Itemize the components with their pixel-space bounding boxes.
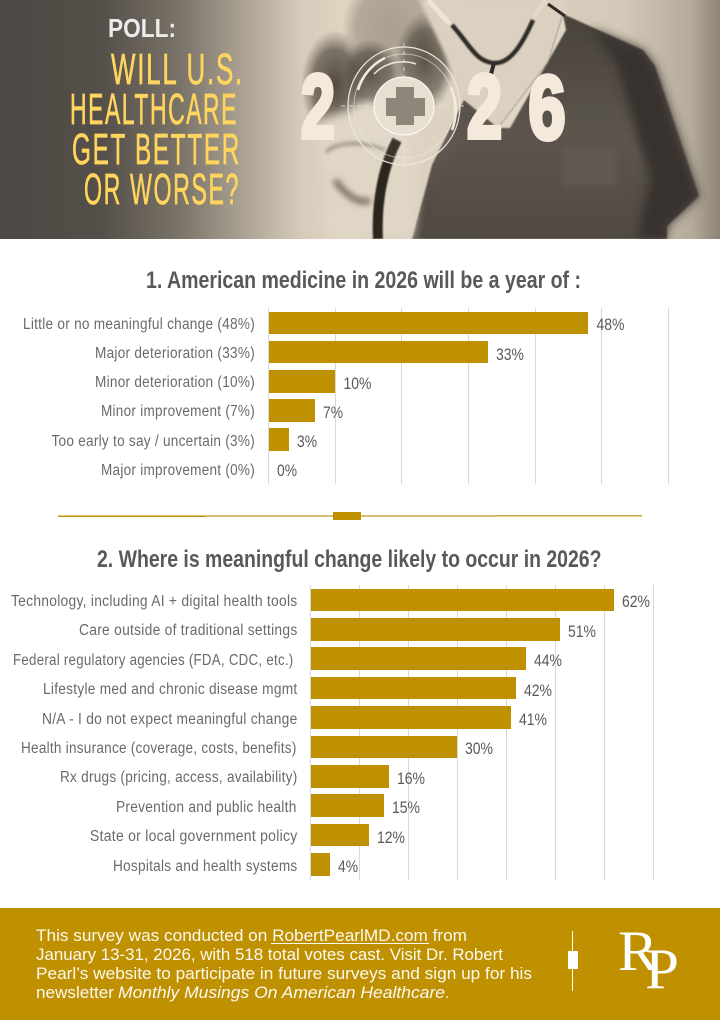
value labels <box>277 315 624 480</box>
value labels: 4% <box>338 857 358 876</box>
value labels: 3% <box>297 432 317 451</box>
category labels: Technology, including AI + digital health tools <box>11 593 298 610</box>
category labels: Major improvement (0%) <box>101 462 255 479</box>
survey note text: Pearl’s website to participate in future surveys and sign up for his <box>36 964 532 983</box>
bars <box>311 589 614 876</box>
headline: OR WORSE? <box>84 165 240 214</box>
value labels: 62% <box>622 592 650 611</box>
value labels: 48% <box>596 315 624 334</box>
headline: HEALTHCARE <box>70 85 238 134</box>
value labels <box>338 592 650 876</box>
headline <box>72 53 240 205</box>
logo: RP monogram: R <box>618 920 658 983</box>
category labels: Minor improvement (7%) <box>101 403 255 420</box>
survey note text: . <box>445 983 449 1002</box>
footer divider <box>568 931 578 991</box>
heading: question 1: 1. American medicine in 2026 will be a year of : <box>146 267 581 294</box>
heading: question 2: 2. Where is meaningful change likely to occur in 2026? <box>97 546 602 573</box>
section divider <box>58 512 642 520</box>
bar chart: question 2 <box>11 585 654 880</box>
category labels: Prevention and public health <box>116 799 297 816</box>
category labels <box>11 593 298 875</box>
category labels: Major deterioration (33%) <box>95 345 255 362</box>
bars <box>269 312 588 451</box>
value labels: 42% <box>524 681 552 700</box>
category labels: Little or no meaningful change (48%) <box>23 316 255 333</box>
value labels: 12% <box>377 828 405 847</box>
category labels: Lifestyle med and chronic disease mgmt <box>43 681 298 698</box>
category labels: Too early to say / uncertain (3%) <box>52 433 255 450</box>
category labels: Care outside of traditional settings <box>79 622 298 639</box>
bar chart: question 1 <box>23 308 668 484</box>
value labels: 15% <box>392 798 420 817</box>
value labels: 41% <box>519 710 547 729</box>
logo: RP monogram: P <box>645 938 679 1001</box>
value labels: 33% <box>496 345 524 364</box>
header banner <box>0 0 720 239</box>
survey note text: January 13-31, 2026, with 518 total votes cast. Visit Dr. Robert <box>36 945 503 964</box>
value labels: 44% <box>534 651 562 670</box>
category labels: Rx drugs (pricing, access, availability) <box>60 769 298 786</box>
value labels: 10% <box>344 374 372 393</box>
2026 graphic: 2 <box>301 58 335 158</box>
header photo: nurse with stethoscope <box>0 0 720 239</box>
category labels: Federal regulatory agencies (FDA, CDC, etc.) <box>13 652 294 669</box>
category labels: Minor deterioration (10%) <box>95 374 255 391</box>
value labels: 16% <box>397 769 425 788</box>
category labels: State or local government policy <box>90 828 298 845</box>
POLL label: POLL: <box>108 13 176 43</box>
headline: GET BETTER <box>72 125 241 174</box>
value labels: 0% <box>277 461 297 480</box>
value labels: 7% <box>323 403 343 422</box>
2026 graphic: 2 <box>467 58 502 158</box>
category labels: N/A - I do not expect meaningful change <box>42 711 298 728</box>
footer panel <box>0 908 720 1020</box>
category labels: Hospitals and health systems <box>113 858 298 875</box>
category labels: Health insurance (coverage, costs, benefits) <box>21 740 297 757</box>
2026 graphic: 6 <box>528 58 566 158</box>
value labels: 30% <box>465 739 493 758</box>
icon: medical cross target <box>341 43 464 172</box>
headline: WILL U.S. <box>111 45 244 94</box>
category labels <box>23 316 255 479</box>
survey note text: Monthly Musings On American Healthcare <box>118 983 445 1002</box>
logo: RP monogram <box>618 920 679 1001</box>
survey note text <box>36 926 532 1002</box>
survey note text: This survey was conducted on RobertPearlMD.com from <box>36 926 467 945</box>
2026 graphic <box>301 43 566 172</box>
value labels: 51% <box>568 622 596 641</box>
survey note text: newsletter <box>36 983 114 1002</box>
